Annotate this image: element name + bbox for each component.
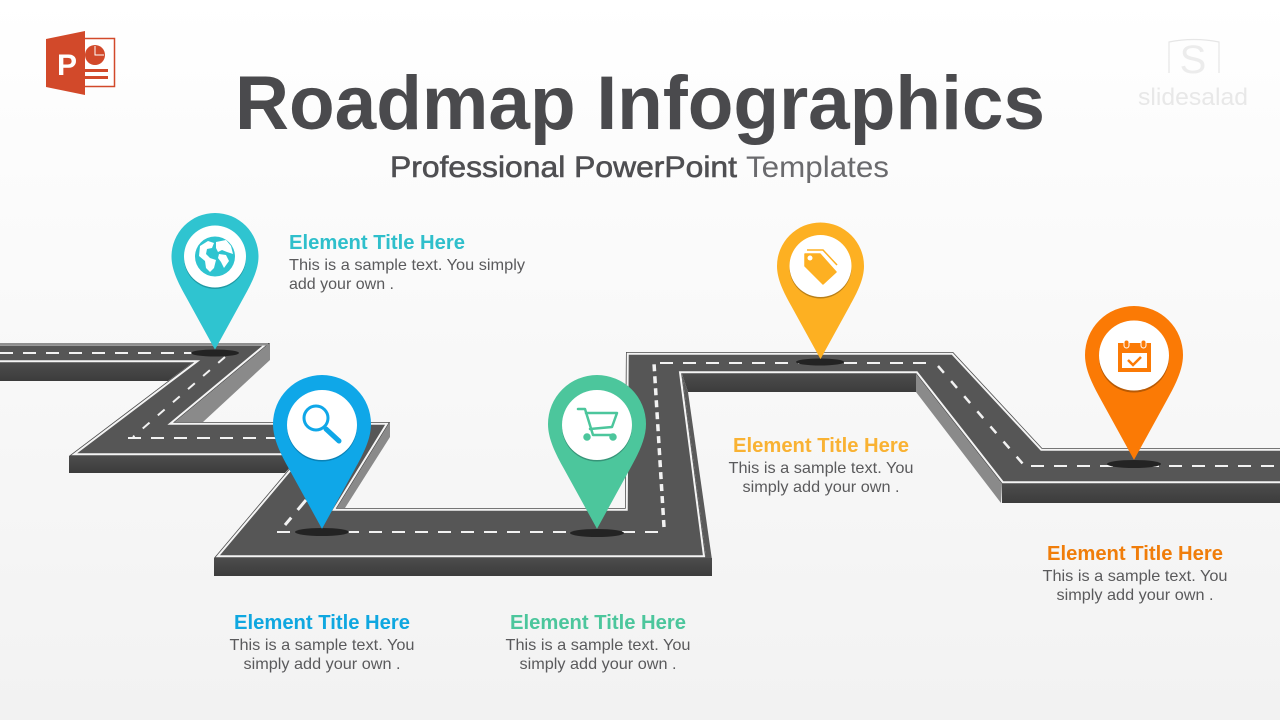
text block: blue xyxy=(230,612,414,673)
icon: shopping cart xyxy=(578,409,617,440)
road surface xyxy=(0,343,1280,558)
text block: teal: add your own . xyxy=(289,276,394,293)
icon: magnifier xyxy=(304,406,339,441)
title: Roadmap Infographics xyxy=(235,61,1045,146)
icon: calendar xyxy=(1118,340,1151,372)
text block: green: simply add your own . xyxy=(520,656,676,673)
text block: teal: This is a sample text. You simply xyxy=(289,257,525,274)
text block: yellow: simply add your own . xyxy=(742,479,900,496)
text block: green: Element Title Here xyxy=(510,612,686,634)
text block: teal: Element Title Here xyxy=(289,232,465,254)
road side walls xyxy=(0,343,1280,576)
icon: slidesalad logo: S xyxy=(1180,38,1206,82)
pin 5: orange calendar xyxy=(1085,306,1183,460)
text block: yellow: Element Title Here xyxy=(733,435,909,457)
text block: green: This is a sample text. You xyxy=(506,637,690,654)
subtitle: Professional PowerPoint xyxy=(390,151,738,184)
text block: blue: Element Title Here xyxy=(234,612,410,634)
text block: orange: Element Title Here xyxy=(1047,543,1223,565)
text block: blue: simply add your own . xyxy=(244,656,400,673)
icon: PowerPoint logo: P xyxy=(57,49,77,82)
icon: slidesalad logo xyxy=(1138,38,1248,111)
pin 2: blue search xyxy=(273,375,371,529)
pin 3: green cart xyxy=(548,375,646,529)
text block: orange xyxy=(1042,543,1228,604)
icon: slidesalad logo: slidesalad xyxy=(1138,84,1248,111)
pin 1: teal globe xyxy=(172,213,258,350)
icon: PowerPoint logo xyxy=(46,31,114,95)
road edge lines xyxy=(0,343,1280,558)
subtitle: Templates xyxy=(746,151,889,184)
text block: blue: This is a sample text. You xyxy=(230,637,414,654)
text block: green xyxy=(506,612,690,673)
subtitle xyxy=(390,151,889,184)
road xyxy=(0,343,1280,576)
pin 4: yellow tag xyxy=(777,222,864,359)
text block: yellow xyxy=(728,435,914,496)
text block: yellow: This is a sample text. You xyxy=(728,460,914,477)
text block: orange: simply add your own . xyxy=(1056,587,1214,604)
icon: globe xyxy=(195,236,235,276)
text block: teal xyxy=(289,232,525,293)
pin hole shadows xyxy=(191,350,1161,537)
road centre dashes xyxy=(0,353,1280,532)
text block: orange: This is a sample text. You xyxy=(1042,568,1228,585)
icon: price tag xyxy=(805,250,837,284)
